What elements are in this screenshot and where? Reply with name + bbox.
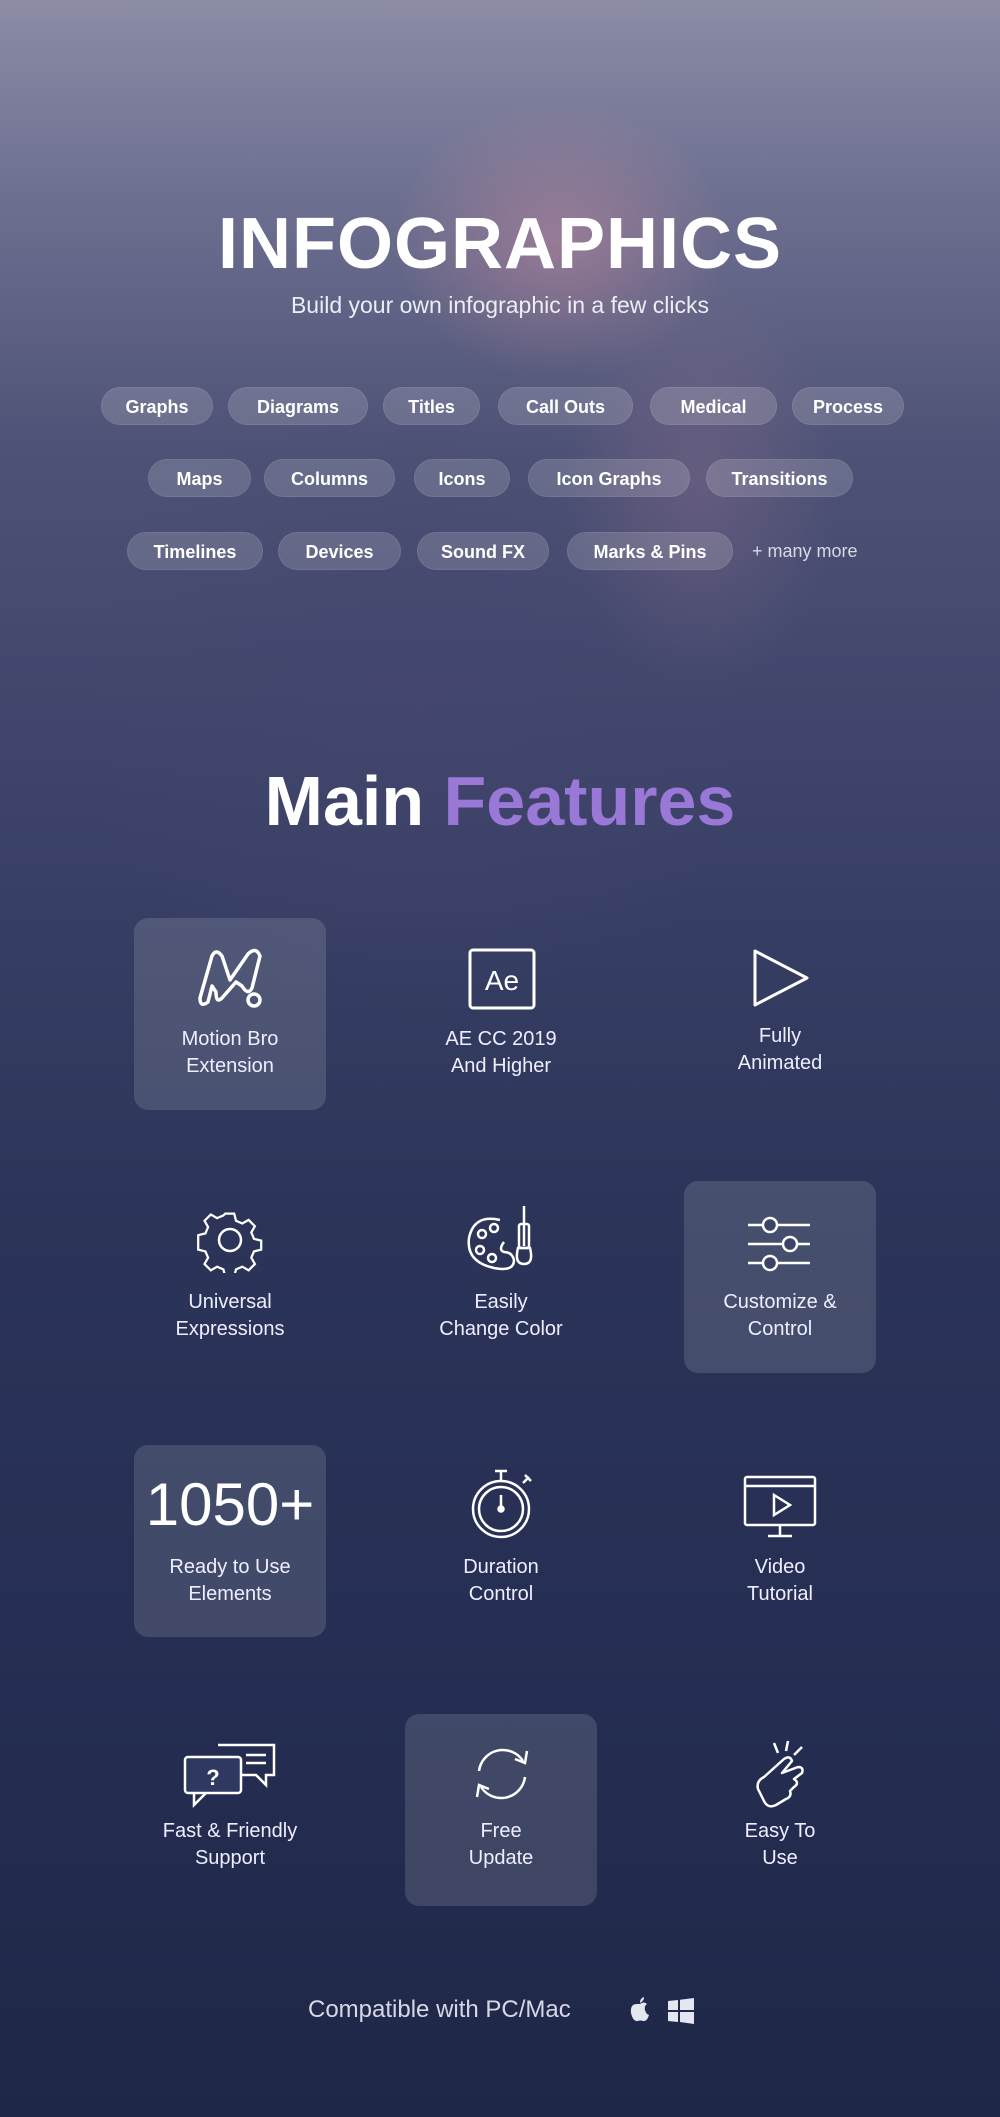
heading: main features: Main Features (265, 762, 735, 840)
feature: AE (445, 948, 557, 1077)
feature: easy to use: Use (762, 1847, 798, 1869)
tags: Diagrams (257, 397, 339, 417)
feature: easy to use (745, 1740, 815, 1869)
footer: compatibility: Compatible with PC/Mac (308, 1996, 571, 2023)
tags: Icon Graphs (556, 469, 662, 489)
tags: Graphs (125, 397, 189, 417)
feature boxes (134, 918, 326, 1110)
tags (101, 387, 904, 570)
feature: support: ? (206, 1765, 220, 1790)
feature: duration control (463, 1470, 539, 1605)
tags: Timelines (154, 542, 236, 562)
feature: motion bro: Extension (186, 1055, 274, 1077)
feature: customize & control: Control (748, 1318, 812, 1340)
tags: Call Outs (526, 397, 605, 417)
feature: support (163, 1744, 298, 1869)
feature: universal expressions: Universal (188, 1291, 272, 1313)
feature: duration control: Duration (463, 1556, 539, 1578)
feature: support: Support (195, 1847, 265, 1869)
tags: Icons (438, 469, 486, 489)
feature: free update: Update (469, 1847, 533, 1869)
subtitle: Build your own infographic in a few clicks (291, 292, 709, 318)
feature: 1050+: 1050+ (146, 1471, 314, 1538)
feature: easily change color (439, 1206, 563, 1340)
feature: motion bro (182, 948, 278, 1077)
feature: 1050+: Ready to Use (169, 1556, 291, 1578)
tags: + many more (752, 541, 858, 561)
feature: fully animated: Animated (738, 1052, 822, 1074)
feature: free update: Free (480, 1820, 522, 1842)
feature: 1050+ (146, 1471, 314, 1605)
feature: customize & control (723, 1216, 837, 1340)
feature: AE: And Higher (451, 1055, 551, 1077)
feature: easily change color: Change Color (439, 1318, 563, 1340)
feature: 1050+: Elements (188, 1583, 272, 1605)
tags: Titles (408, 397, 455, 417)
feature: video tutorial: Video (755, 1556, 805, 1578)
feature: duration control: Control (469, 1583, 533, 1605)
feature: free update (469, 1748, 533, 1869)
feature: universal expressions (176, 1212, 284, 1340)
tags: Devices (305, 542, 374, 562)
feature: AE: Ae (485, 965, 519, 996)
feature: easy to use: Easy To (745, 1820, 815, 1842)
tags: Medical (680, 397, 747, 417)
icon: windows (668, 1998, 694, 2024)
tags: Maps (176, 469, 222, 489)
tags: Sound FX (441, 542, 525, 562)
feature: motion bro: Motion Bro (182, 1028, 278, 1050)
feature: AE: AE CC 2019 (445, 1028, 557, 1050)
footer: compatibility (308, 1996, 694, 2024)
icon: apple (630, 1997, 649, 2022)
feature: video tutorial (744, 1476, 816, 1605)
tags: Columns (291, 469, 368, 489)
feature: support: Fast & Friendly (163, 1820, 297, 1842)
feature: fully animated (738, 950, 822, 1074)
tags: Marks & Pins (593, 542, 707, 562)
feature: customize & control: Customize & (723, 1291, 837, 1313)
title: INFOGRAPHICS (218, 204, 782, 284)
tags: Transitions (731, 469, 828, 489)
feature: universal expressions: Expressions (176, 1318, 284, 1340)
feature: fully animated: Fully (759, 1025, 801, 1047)
tags: Process (813, 397, 883, 417)
feature: easily change color: Easily (474, 1291, 528, 1313)
feature: video tutorial: Tutorial (747, 1583, 813, 1605)
